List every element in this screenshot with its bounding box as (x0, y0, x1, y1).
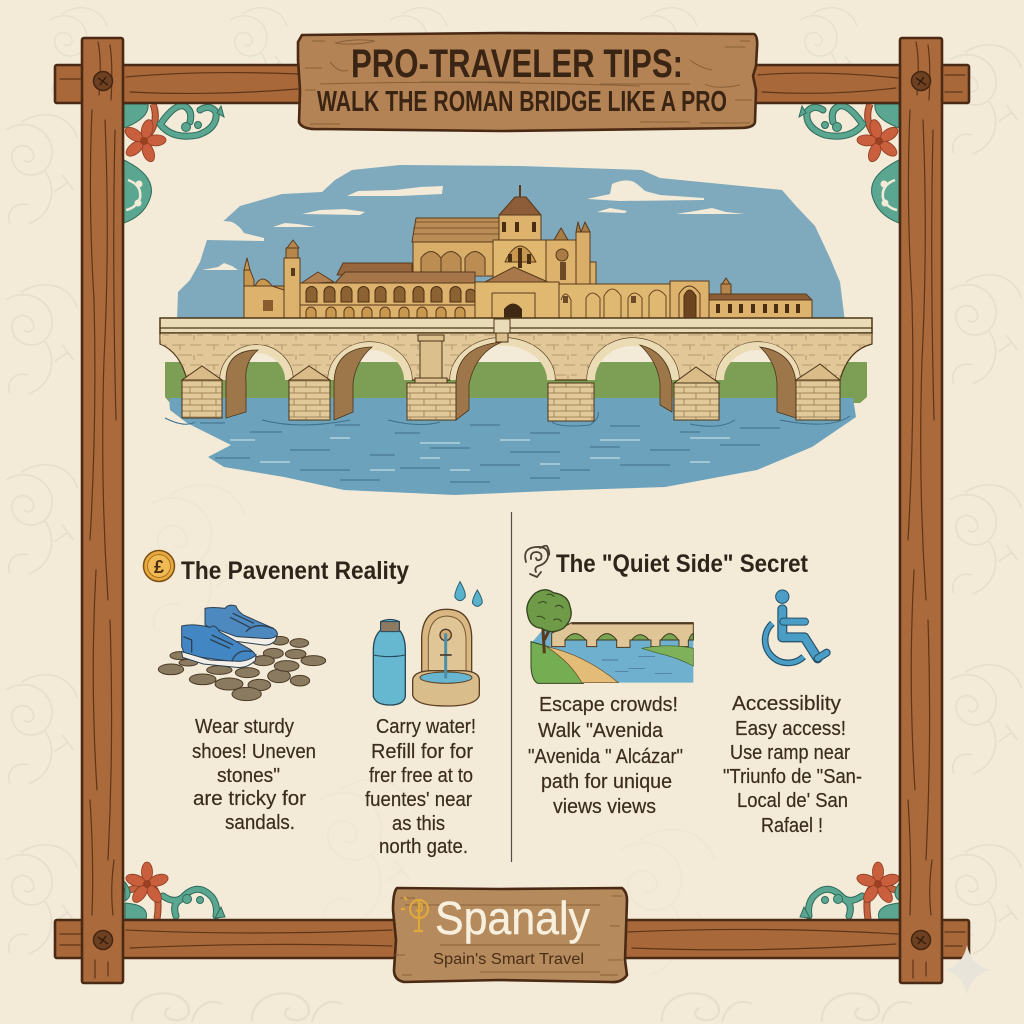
tip text: water (365, 716, 476, 858)
icon: question mark swirl (525, 546, 549, 577)
right wall (559, 281, 709, 318)
central gate (475, 267, 559, 318)
corner flourish: bottom left (124, 862, 225, 919)
title line 1: PRO-TRAVELER TIPS: (351, 42, 683, 86)
tip text: shoes: are tricky for (193, 788, 306, 810)
arch soffits in shadow (226, 342, 796, 420)
cloister wing (300, 272, 475, 318)
sky (177, 165, 845, 322)
tip text: accessibility: Accessiblity (732, 693, 841, 715)
footer plaque: Spanaly brand (393, 888, 627, 982)
left towers (244, 240, 300, 318)
sparkle watermark (945, 945, 990, 995)
corner flourish: top right (799, 104, 906, 223)
right chapel (546, 222, 596, 284)
heading: The "Quiet Side" Secret (556, 550, 809, 578)
water ripples (200, 423, 780, 482)
upper hall (412, 218, 501, 276)
left post (82, 38, 123, 983)
plaque board (393, 888, 627, 982)
back nave roof (337, 263, 412, 275)
dome tower (493, 185, 546, 284)
tip text: accessibility (723, 693, 862, 837)
tip text: escape crowds: Walk "Avenida (538, 720, 664, 742)
plaque wood grain (305, 40, 752, 124)
column divider (510, 512, 512, 862)
tip text: escape crowds: Escape crowds! (539, 694, 678, 716)
tip text: water: as this (392, 813, 445, 835)
right post (900, 38, 942, 983)
riverbank greenery (165, 362, 867, 403)
icon: gold coin (144, 550, 174, 582)
tagline: Spain's Smart Travel (433, 951, 584, 968)
icon: shoes on stones (158, 605, 326, 701)
clouds (202, 180, 745, 270)
tip text: water: north gate. (379, 836, 468, 858)
tip text: water: frer free at to (369, 765, 473, 787)
tip text: shoes: stones" (217, 765, 280, 787)
title line 2: WALK THE ROMAN BRIDGE LIKE A PRO (317, 86, 727, 118)
tip text: shoes: shoes! Uneven (192, 741, 316, 763)
title plaque (298, 33, 757, 131)
frame pegs (94, 72, 930, 950)
corner flourish: top left (117, 104, 224, 223)
icon: bottle and fountain (373, 582, 482, 706)
tip text: accessibility: Easy access! (735, 718, 846, 740)
tip text: escape crowds (528, 694, 683, 818)
river (169, 398, 856, 495)
bridge deck and wall (160, 318, 872, 421)
right low building (709, 278, 812, 318)
cathedral building (244, 185, 812, 318)
plaque wood grain (395, 896, 622, 975)
corner flourish: bottom right (800, 862, 901, 919)
tip text: water: fuentes' near (365, 789, 472, 811)
icon: gold coin: £ (154, 557, 164, 577)
arch rings (224, 342, 796, 380)
tip text: accessibility: Use ramp near (730, 742, 850, 764)
icon: gold key emblem (401, 897, 428, 931)
tip text: accessibility: Local de' San (737, 790, 848, 812)
icon: wheelchair (765, 590, 827, 663)
tip text: escape crowds: views views (553, 796, 656, 818)
tip text: water: Carry water! (376, 716, 476, 738)
brand name: Spanaly (435, 892, 590, 944)
bottom beam (55, 920, 969, 958)
tip text: accessibility: "Triunfo de "San- (723, 766, 862, 788)
central shrine and parapet box (415, 319, 510, 383)
tip text: escape crowds: "Avenida " Alcázar" (528, 746, 683, 768)
tip text: shoes: Wear sturdy (195, 716, 294, 738)
tip text: water: Refill for for (371, 741, 473, 763)
plaque board (298, 33, 757, 131)
icon: riverside path scene (527, 590, 693, 683)
tip text: accessibility: Rafael ! (761, 815, 823, 837)
tip text: shoes (192, 716, 316, 834)
piers (182, 364, 840, 421)
tip text: shoes: sandals. (225, 812, 295, 834)
tip text: escape crowds: path for unique (541, 771, 672, 793)
heading: The Pavenent Reality (181, 557, 409, 585)
panel: the quiet side secret (525, 546, 862, 837)
top beam (55, 65, 969, 103)
panel: the pavement reality (144, 550, 482, 858)
hero illustration: bridge and mosque-cathedral (160, 165, 872, 495)
